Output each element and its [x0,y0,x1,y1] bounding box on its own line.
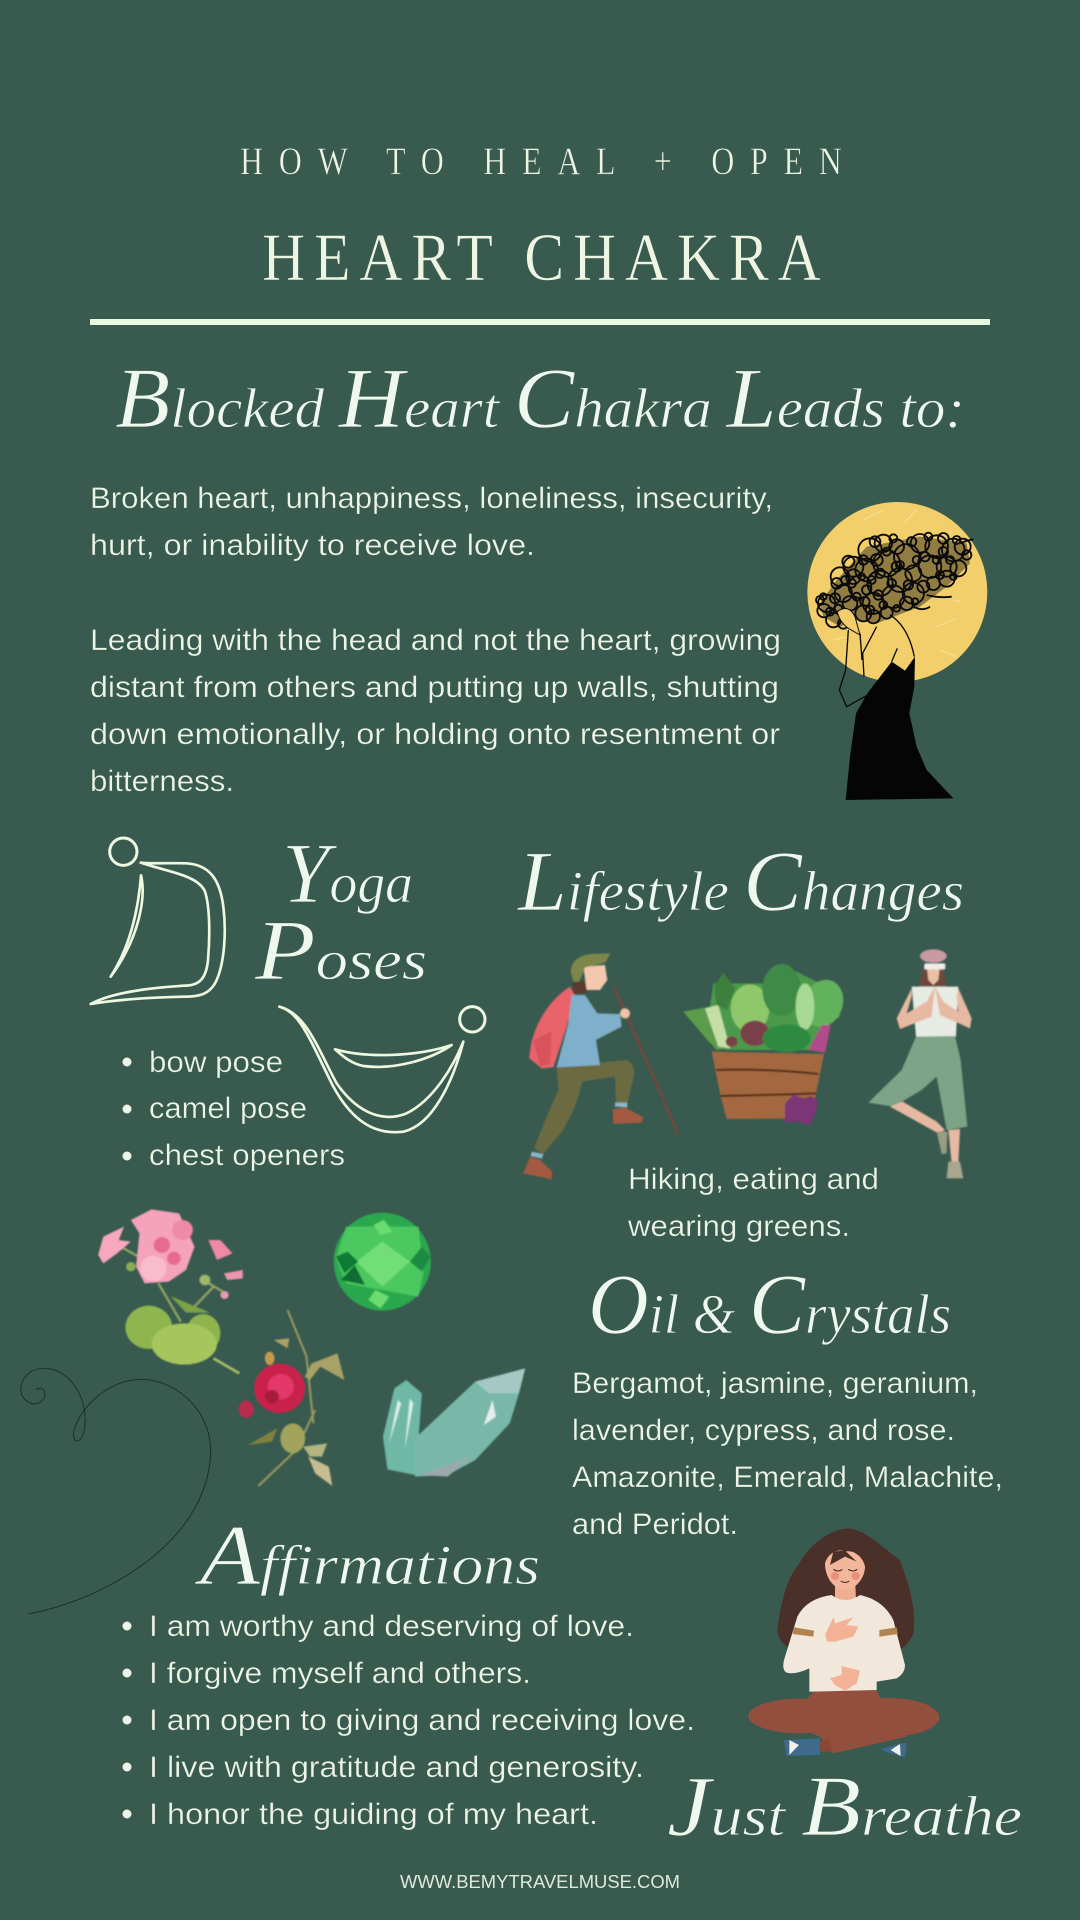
icon: emerald [334,1213,431,1311]
text block: symptoms: bitterness. [90,765,234,798]
list: affirmations: I am worthy and deserving of love. [149,1610,634,1643]
text block: symptoms: Leading with the head and not the heart, growing [90,624,781,657]
icon: crate of greens [683,964,850,1125]
text block: oils and crystals: lavender, cypress, and rose. [572,1414,955,1447]
icon: camel pose figure [279,1007,485,1132]
text block: symptoms: hurt, or inability to receive love. [90,529,535,562]
list: affirmations: I honor the guiding of my heart. [149,1798,598,1831]
heading: poses: Poses [254,902,427,998]
text block: oils and crystals: Bergamot, jasmine, geranium, [572,1367,978,1400]
text block: symptoms [90,482,781,798]
illustrations: hiker, greens, tree pose [523,949,972,1179]
heading: just breathe: Just Breathe [667,1758,1022,1854]
icon: crystals [383,1368,525,1477]
list: affirmations: I live with gratitude and generosity. [149,1751,644,1784]
heading: lifestyle changes: Lifestyle Changes [516,833,964,929]
text block: oils and crystals: Amazonite, Emerald, Malachite, [572,1461,1003,1494]
illustration: meditating woman [748,1528,939,1757]
icon: hiker [523,953,678,1179]
list: affirmations: I forgive myself and others. [149,1657,531,1690]
panel: oils and crystals art [98,1209,525,1486]
icon: rose [239,1310,344,1486]
panel: lifestyle changes [516,833,972,1243]
list: yoga poses: chest openers [149,1139,345,1172]
subtitle: HOW TO HEAL + OPEN [240,139,842,183]
icon: bow pose figure [91,838,225,1004]
text block: symptoms: distant from others and putting up walls, shutting [90,671,779,704]
list: yoga poses: camel pose [149,1092,307,1125]
list: yoga poses [122,1046,345,1172]
icon: tree pose woman [868,949,972,1178]
icon: woman before moon [807,502,987,800]
panel: affirmations [122,1507,695,1831]
text block: oils and crystals [572,1367,1003,1541]
heading: oil and crystals: Oil & Crystals [588,1256,951,1352]
text block: symptoms: down emotionally, or holding onto resentment or [90,718,780,751]
text block: symptoms: Broken heart, unhappiness, loneliness, insecurity, [90,482,773,515]
panel: oil and crystals [572,1256,1003,1541]
text block: hiking: Hiking, eating and [628,1163,879,1196]
heading: yoga: Yoga [282,825,413,921]
header [90,139,990,325]
footer: website: WWW.BEMYTRAVELMUSE.COM [400,1871,680,1892]
text block: hiking [627,1163,879,1243]
title rule [90,319,990,325]
panel: yoga poses [91,825,485,1172]
icon: geranium [98,1209,243,1373]
list: affirmations [122,1610,695,1831]
title: HEART CHAKRA [262,219,821,295]
decorative swirl [21,1368,211,1614]
panel: blocked heart chakra [90,350,987,800]
list: yoga poses: bow pose [149,1046,283,1079]
heading: affirmations: Affirmations [194,1507,540,1603]
heading: blocked: Blocked Heart Chakra Leads to: [115,350,965,446]
text block: hiking: wearing greens. [627,1210,850,1243]
list: affirmations: I am open to giving and receiving love. [149,1704,695,1737]
text block: oils and crystals: and Peridot. [572,1508,738,1541]
